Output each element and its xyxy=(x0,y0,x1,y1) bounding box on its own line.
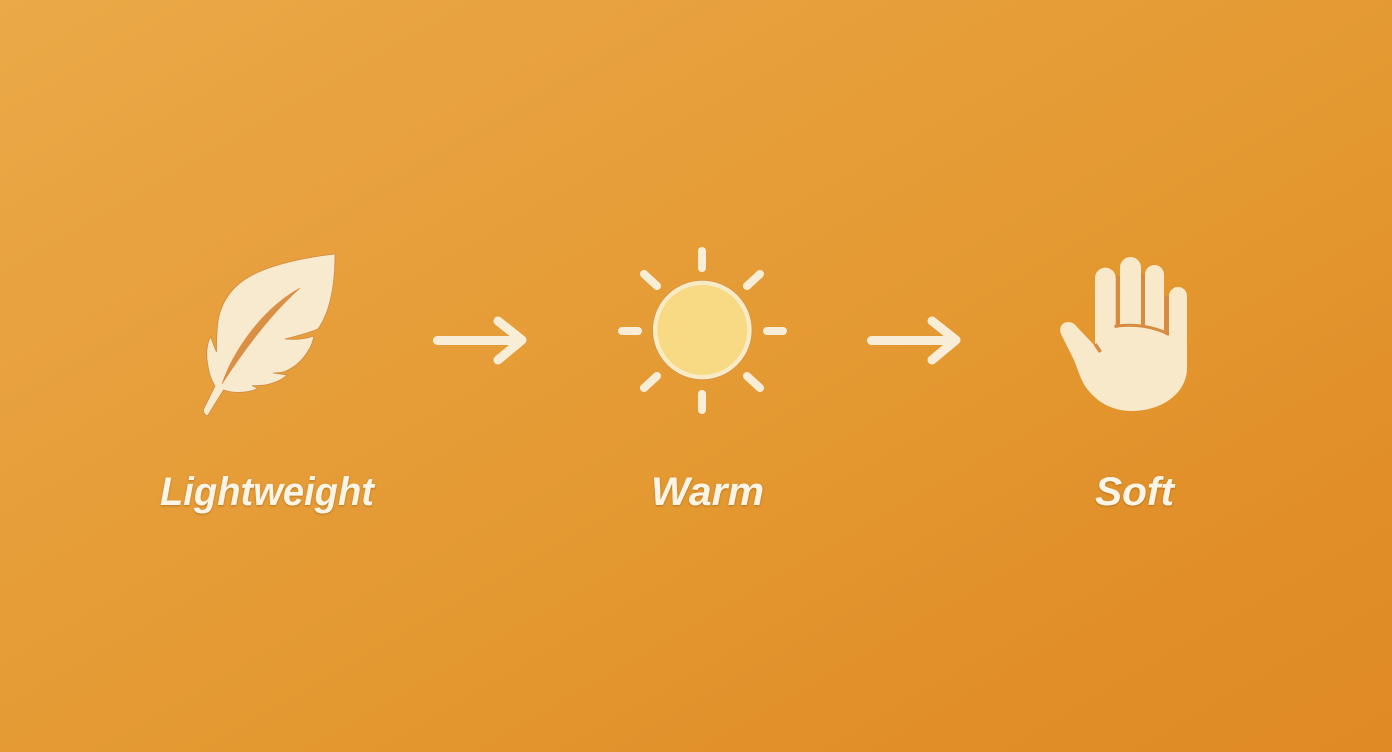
ring finger xyxy=(1145,265,1164,331)
icon: sun xyxy=(622,251,783,410)
arrow: sun to hand xyxy=(872,321,956,360)
palm, thumb, index and little finger xyxy=(1060,268,1187,411)
icon: hand xyxy=(1060,257,1187,411)
palm crease xyxy=(1114,325,1169,334)
sun rays xyxy=(622,251,783,410)
label: Warm: Warm xyxy=(651,470,764,514)
label: Soft: Soft xyxy=(1095,470,1176,514)
sun disc xyxy=(653,280,752,380)
label: Lightweight: Lightweight xyxy=(160,470,376,514)
arrow: feather to sun xyxy=(438,321,522,360)
middle finger xyxy=(1120,257,1141,326)
icon: feather xyxy=(203,254,335,416)
feather vein xyxy=(222,288,300,384)
thumb crease xyxy=(1095,344,1100,352)
finger gaps xyxy=(1118,274,1166,335)
